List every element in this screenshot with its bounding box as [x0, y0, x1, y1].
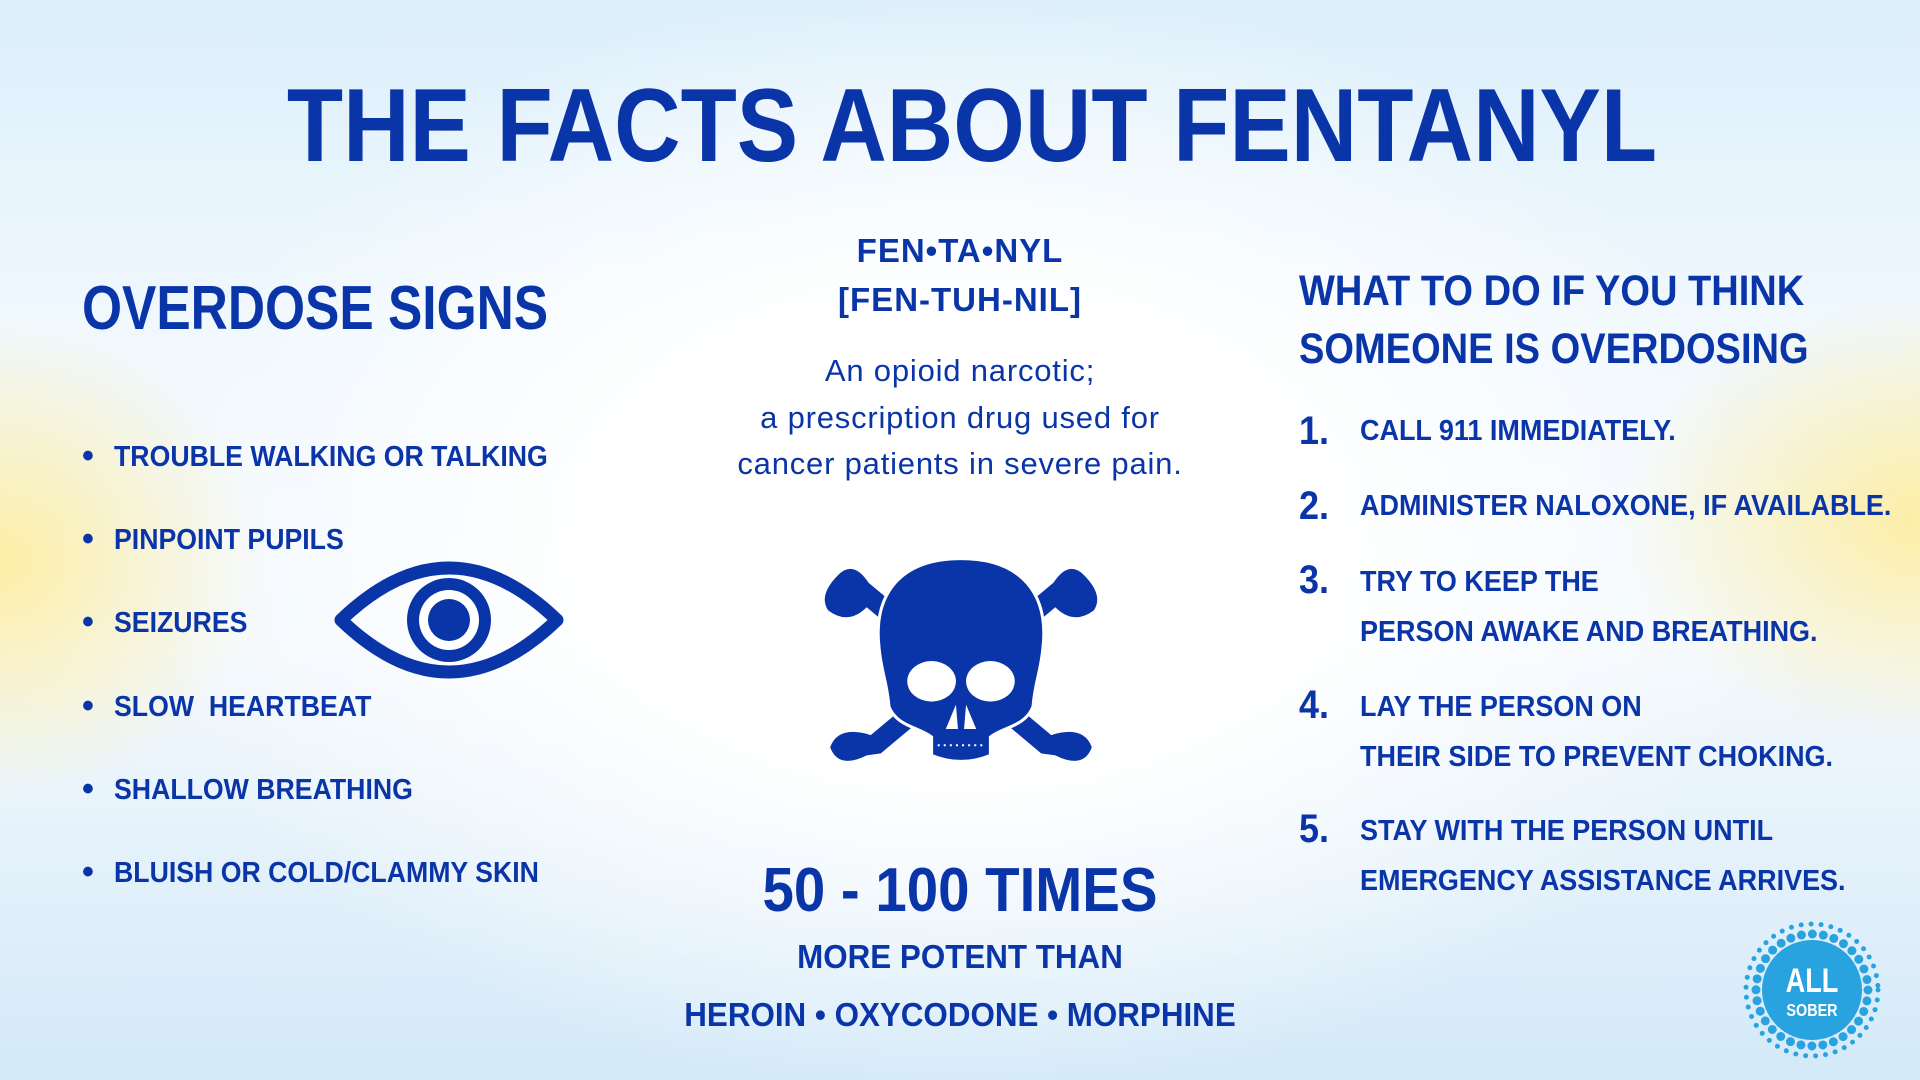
- bullet list: SEIZURES: [114, 607, 247, 639]
- steps list: 4.: [1299, 683, 1329, 727]
- bullet list: [82, 437, 548, 891]
- logo: all sober: SOBER: [1786, 1001, 1838, 1020]
- bullet list: PINPOINT PUPILS: [114, 524, 344, 556]
- bullet list: •: [82, 603, 94, 641]
- bullet list: SLOW HEARTBEAT: [114, 691, 371, 723]
- bullet list: SHALLOW BREATHING: [114, 774, 413, 806]
- bullet list: •: [82, 770, 94, 808]
- steps list: [1299, 409, 1891, 897]
- steps list: ADMINISTER NALOXONE, IF AVAILABLE.: [1360, 490, 1891, 522]
- steps list: 3.: [1299, 558, 1329, 602]
- logo: all sober: ALL: [1786, 961, 1838, 1000]
- bullet list: •: [82, 520, 94, 558]
- steps list: 2.: [1299, 484, 1329, 528]
- description: [737, 353, 1183, 481]
- pronunciation: [838, 232, 1082, 318]
- title: THE FACTS ABOUT FENTANYL: [287, 68, 1657, 184]
- steps list: STAY WITH THE PERSON UNTIL: [1360, 815, 1773, 847]
- description: An opioid narcotic;: [825, 353, 1095, 388]
- panel: overdose signs: [82, 274, 548, 891]
- steps list: LAY THE PERSON ON: [1360, 691, 1642, 723]
- description: a prescription drug used for: [760, 400, 1160, 434]
- steps list: PERSON AWAKE AND BREATHING.: [1360, 616, 1818, 648]
- heading: [1299, 267, 1809, 373]
- steps list: 1.: [1299, 409, 1329, 453]
- steps list: TRY TO KEEP THE: [1360, 566, 1599, 598]
- steps list: 5.: [1299, 807, 1329, 851]
- comparison text: [684, 938, 1236, 1033]
- potency callout: [684, 856, 1236, 1033]
- logo: all sober: [1744, 922, 1880, 1058]
- big number: 50 - 100 TIMES: [762, 856, 1158, 925]
- icon: eye: [334, 562, 564, 678]
- pronunciation: FEN•TA•NYL: [857, 232, 1063, 269]
- panel: what to do: [1299, 267, 1891, 897]
- pronunciation: [FEN-TUH-NIL]: [838, 281, 1082, 318]
- description: cancer patients in severe pain.: [737, 446, 1183, 481]
- bullet list: •: [82, 853, 94, 891]
- panel: definition: [737, 232, 1183, 481]
- heading: overdose signs: OVERDOSE SIGNS: [82, 274, 548, 343]
- bullet list: BLUISH OR COLD/CLAMMY SKIN: [114, 857, 539, 889]
- steps list: EMERGENCY ASSISTANCE ARRIVES.: [1360, 865, 1846, 897]
- steps list: CALL 911 IMMEDIATELY.: [1360, 415, 1676, 447]
- comparison text: MORE POTENT THAN: [797, 938, 1123, 975]
- bullet list: TROUBLE WALKING OR TALKING: [114, 441, 548, 473]
- steps list: THEIR SIDE TO PREVENT CHOKING.: [1360, 741, 1833, 773]
- bullet list: •: [82, 437, 94, 475]
- heading: WHAT TO DO IF YOU THINK: [1299, 267, 1804, 315]
- bullet list: •: [82, 687, 94, 725]
- icon: skull and crossbones: [824, 560, 1098, 761]
- heading: SOMEONE IS OVERDOSING: [1299, 325, 1809, 373]
- comparison text: HEROIN • OXYCODONE • MORPHINE: [684, 996, 1236, 1033]
